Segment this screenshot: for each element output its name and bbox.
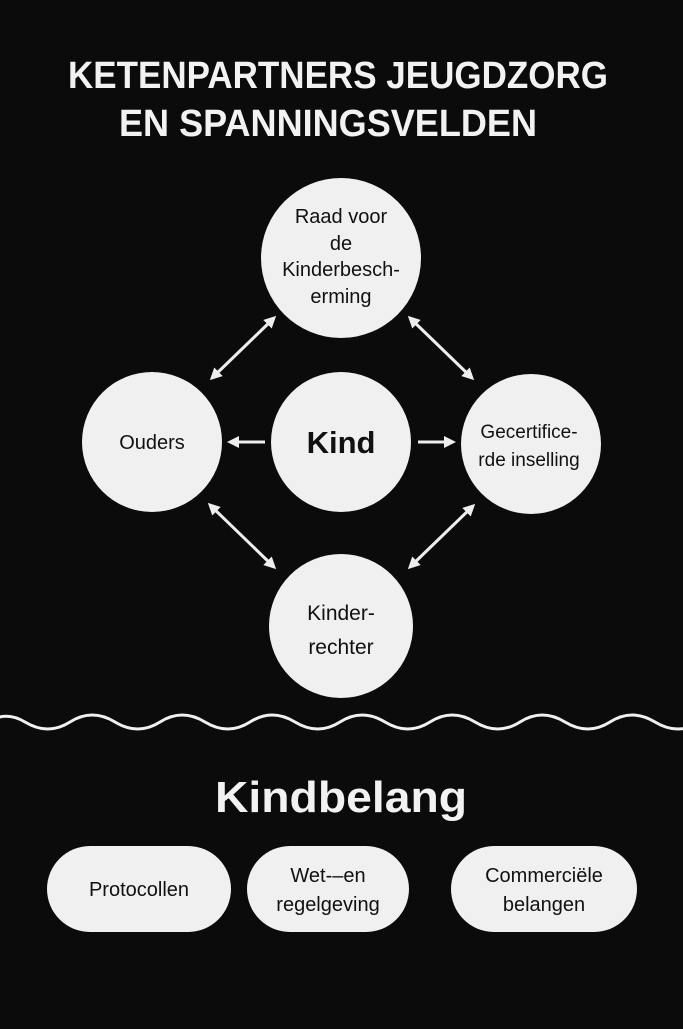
circle: Kind [271, 372, 411, 512]
circle: Ouders [82, 372, 222, 512]
circle: Ouders: Ouders [119, 432, 185, 454]
circle: Gecertificeerde instelling: Gecertifice- [480, 422, 578, 443]
circle: Raad voor de Kinderbescherming: erming [310, 286, 372, 308]
arrows [210, 318, 473, 567]
pill: Commerciële belangen [451, 846, 637, 932]
title: EN SPANNINGSVELDEN [119, 103, 537, 145]
circle: Raad voor de Kinderbescherming: de [330, 233, 352, 255]
circle: Gecertificeerde instelling [461, 374, 601, 514]
circle: Kind: Kind [307, 425, 375, 460]
wave divider [0, 715, 683, 729]
circle: Raad voor de Kinderbescherming: Raad voor [295, 206, 387, 228]
pill: Wet- en regelgeving [247, 846, 409, 932]
pill: Commerciële belangen: Commerciële [485, 865, 603, 887]
pill: Wet- en regelgeving: regelgeving [276, 894, 380, 916]
circle: Raad voor de Kinderbescherming [261, 178, 421, 338]
title [68, 55, 608, 145]
title: KETENPARTNERS JEUGDZORG [68, 55, 608, 97]
circle: Gecertificeerde instelling: rde inselling [478, 450, 580, 471]
circle: Kinderrechter: Kinder- [307, 602, 375, 625]
circle: Kinderrechter: rechter [308, 636, 374, 659]
pill: Commerciële belangen: belangen [503, 894, 585, 916]
pill: Protocollen [47, 846, 231, 932]
pill: Protocollen: Protocollen [89, 879, 189, 901]
heading: Kindbelang: Kindbelang [215, 773, 467, 822]
circle: Raad voor de Kinderbescherming: Kinderbesch- [282, 259, 400, 281]
pill: Wet- en regelgeving: Wet-–en [290, 865, 366, 887]
circle: Kinderrechter [269, 554, 413, 698]
